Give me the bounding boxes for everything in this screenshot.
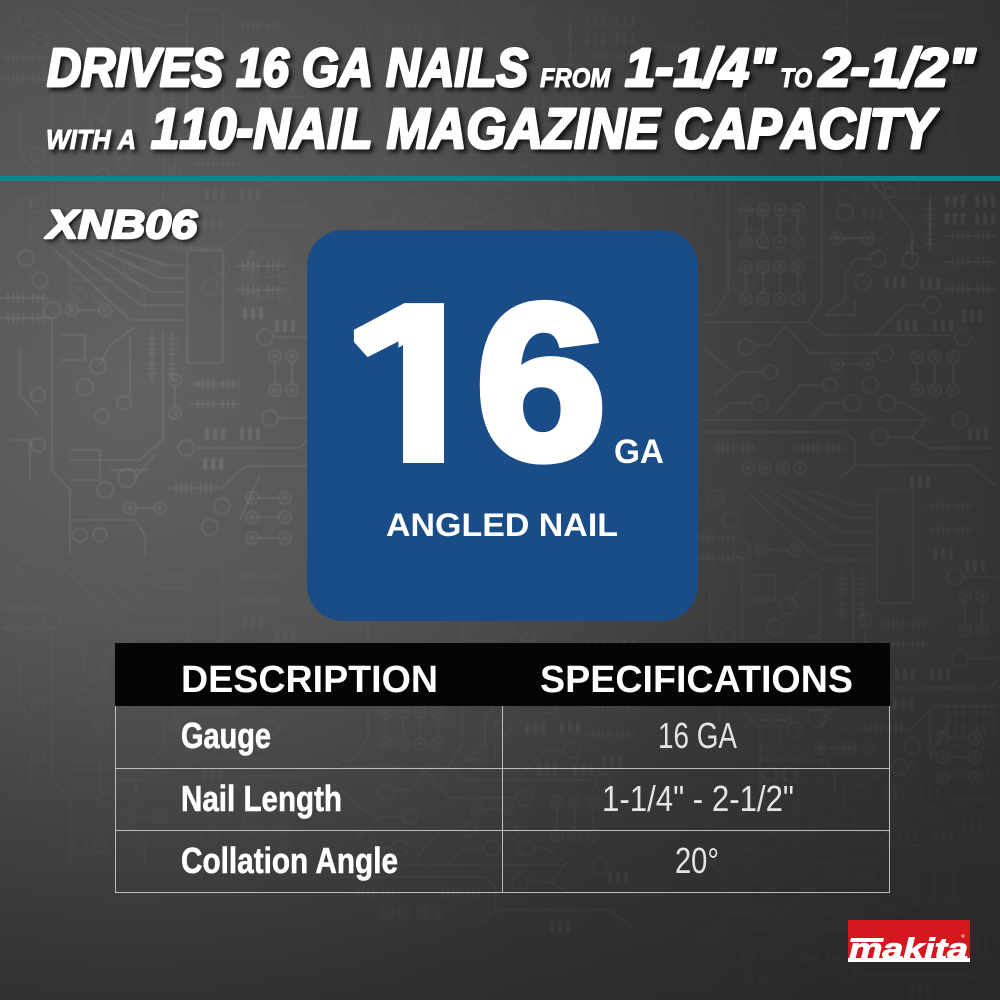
title line 1: 1-1/4": [625, 38, 776, 98]
specifications table: [115, 643, 890, 892]
angled nail label: ANGLED NAIL: [386, 507, 618, 543]
row: gauge: 16 GA: [658, 715, 737, 756]
title line 2: 110-NAIL MAGAZINE CAPACITY: [151, 97, 939, 161]
GA unit: GA: [614, 433, 664, 471]
row: collation angle: [181, 840, 719, 881]
big number 16: 6: [476, 259, 606, 505]
row: collation angle: Collation Angle: [181, 840, 398, 881]
model number: XNB06: [45, 203, 198, 247]
big number 16: [354, 300, 602, 465]
title line 2: WITH A: [46, 124, 136, 155]
title line 1: 2-1/2": [818, 38, 976, 98]
table header: [115, 643, 890, 706]
row: nail length: [181, 778, 794, 819]
title line 1: [47, 38, 976, 98]
table header: SPECIFICATIONS: [540, 659, 853, 701]
row: gauge: [181, 715, 737, 756]
title line 1: DRIVES 16 GA NAILS: [47, 38, 528, 98]
row: gauge: Gauge: [181, 715, 271, 756]
panel: gauge badge: [307, 230, 698, 621]
title: [46, 38, 976, 161]
big number 16: 1: [341, 260, 491, 506]
logo: makita: makita: [849, 933, 968, 966]
logo: makita: [848, 920, 970, 966]
table header: DESCRIPTION: [181, 659, 438, 701]
title line 1: TO: [780, 63, 812, 93]
row: collation angle: 20°: [675, 840, 719, 881]
table grid: [115, 706, 890, 892]
row: nail length: 1-1/4" - 2-1/2": [602, 778, 794, 819]
row: nail length: Nail Length: [181, 778, 342, 819]
title line 1: FROM: [540, 63, 610, 93]
teal divider: [0, 176, 1000, 181]
